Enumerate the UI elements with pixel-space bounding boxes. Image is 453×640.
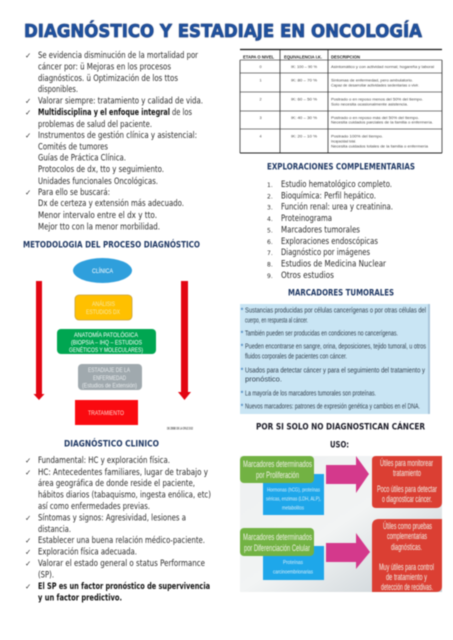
text block: clinical diagnosis: ✓ (25, 468, 31, 477)
node: tratamiento: TRATAMIENTO (88, 411, 124, 417)
title: DIAGNÓSTICO Y ESTADIAJE EN ONCOLOGÍA (24, 20, 422, 42)
numbered list: complementary studies: Función renal: urea y creatinina. (281, 202, 393, 212)
text block: clinical diagnosis: ✓ (25, 559, 31, 568)
text block: general points: Guías de Práctica Clínica. (38, 154, 126, 164)
table: performance status: IK: 40 – 30 % (291, 116, 318, 120)
table: performance status: Capaz de desarrollar actividades sedentarias o vivir. (331, 84, 419, 88)
text block: clinical diagnosis (25, 455, 211, 604)
box: proliferation markers: Marcadores determinados (243, 458, 312, 469)
node: análisis: ANÁLISIS (92, 301, 115, 308)
box: proliferation uses: tratamiento (393, 467, 421, 478)
text block: clinical diagnosis: HC: Antecedentes familiares, lugar de trabajo y (38, 468, 208, 478)
panel: tumour markers: * (240, 388, 244, 398)
numbered list: complementary studies: 8. (267, 262, 273, 268)
box: differentiation markers: carcinoembrionarias (273, 570, 313, 576)
text block: clinical diagnosis: área geográfica de donde reside el paciente, (38, 479, 195, 489)
text block: general points: ✓ (25, 96, 31, 106)
panel: tumour markers: La mayoría de los marcadores tumorales son proteínas. (245, 388, 376, 398)
table: performance status: 0 (260, 65, 262, 69)
table: performance status: Postrado o en reposo más del 50% del tiempo. (331, 116, 419, 120)
table: performance status: 4 (260, 134, 262, 138)
text block: general points (25, 50, 203, 232)
text block: general points: Valorar siempre: tratamiento y calidad de vida. (38, 96, 203, 106)
text block: general points: ✓ (25, 108, 31, 117)
heading: metodología: METODOLOGIA DEL PROCESO DIAGNÓSTICO (23, 238, 200, 250)
node: estadiaje: ESTADIAJE DE LA (88, 368, 130, 374)
heading: uso: USO: (330, 440, 349, 450)
panel: tumour markers: pronóstico. (245, 374, 282, 384)
table: performance status: Necesita cuidados parciales de la familia o enfermería. (331, 120, 433, 124)
box: differentiation uses: diagnósticas. (391, 541, 422, 552)
text block: clinical diagnosis: ✓ (25, 456, 31, 465)
node: anatomía patológica: GENÉTICOS Y MOLECULARES) (69, 347, 143, 354)
numbered list: complementary studies: Diagnóstico por imágenes (281, 247, 370, 258)
text block: general points: Dx de certeza y extensión más adecuado. (38, 198, 184, 209)
arrow: right red (178, 281, 191, 400)
table: performance status: 1 (260, 78, 262, 82)
text block: general points: Se evidencia disminución de la mortalidad por (38, 50, 198, 61)
text block: clinical diagnosis: Síntomas y signos: Agresividad, lesiones a (38, 514, 186, 524)
numbered list: complementary studies: 1. (267, 182, 273, 189)
text block: general points: Menor intervalo entre el dx y tto. (38, 211, 157, 221)
panel: tumour markers (240, 304, 430, 414)
box: differentiation uses: de tratamiento y (386, 571, 427, 582)
arrow: pink bottom (326, 533, 370, 569)
numbered list: complementary studies: Estudios de Medicina Nuclear (281, 260, 386, 270)
flow chart: diagnostic process (34, 258, 193, 430)
numbered list: complementary studies (267, 179, 393, 281)
table: performance status: IK: 60 – 50 % (291, 98, 318, 102)
text block: general points: disponibles. (38, 85, 78, 95)
text block: clinical diagnosis: ✓ (25, 536, 31, 545)
text block: clinical diagnosis: Exploración física adecuada. (38, 546, 137, 558)
table: performance status: IK: 20 – 10 % (291, 134, 318, 138)
text block: clinical diagnosis: Fundamental: HC y exploración física. (38, 455, 170, 466)
heading: exploraciones complementarias: EXPLORACIONES COMPLEMENTARIAS (267, 162, 415, 172)
box: differentiation markers: por Diferenciación Celular (244, 542, 310, 553)
numbered list: complementary studies: Bioquímica: Perfil hepático. (281, 192, 376, 202)
text block: clinical diagnosis: El SP es un factor pronóstico de supervivencia (38, 581, 210, 592)
table: performance status: EQUIVALENCIA I.K. (284, 54, 322, 60)
box: proliferation markers: metabolitos (282, 506, 304, 512)
panel: tumour markers: fluidos corporales de pacientes con cáncer. (245, 352, 347, 360)
text block: general points: Para ello se buscará: (38, 188, 110, 198)
text block: clinical diagnosis: ✓ (25, 514, 31, 522)
text block: clinical diagnosis: Establecer una buena relación médico-paciente. (38, 535, 205, 546)
text block: general points: Multidisciplina y el enfoque integral (38, 108, 170, 118)
numbered list: complementary studies: 3. (267, 204, 273, 212)
node: análisis (75, 295, 132, 320)
panel: tumour markers: cuerpo, en respuesta al cáncer. (245, 316, 308, 324)
text block: clinical diagnosis: hábitos diarios (tabaquismo, ingesta enólica, etc) (38, 490, 211, 500)
text block: general points: Mejor tto con la menor morbilidad. (38, 222, 160, 232)
panel: tumour markers: * (240, 328, 244, 338)
panel: tumour markers: * (240, 306, 244, 314)
text block: general points: ✓ (25, 51, 31, 60)
box: proliferation markers: por Proliferación (256, 469, 299, 480)
node: clínica: CLÍNICA (92, 268, 113, 275)
text block: clinical diagnosis: (SP). (38, 570, 54, 580)
panel: tumour markers: * (240, 366, 244, 374)
numbered list: complementary studies: 7. (267, 250, 273, 257)
text block: general points: problemas de salud del paciente. (38, 120, 152, 130)
numbered list: complementary studies: 6. (267, 239, 273, 246)
source note: DE ZIEBE DE LA CRUZ 2022 (167, 426, 193, 430)
numbered list: complementary studies: 9. (267, 273, 273, 280)
panel: tumour markers: * (240, 342, 244, 350)
text block: general points: Protocolos de dx, tto y seguimiento. (38, 165, 164, 175)
numbered list: complementary studies: 2. (267, 194, 273, 200)
text block: clinical diagnosis: distancia. (38, 525, 71, 535)
node: estadiaje (78, 364, 142, 390)
table: performance status: ETAPA O NIVEL (243, 54, 274, 60)
box: differentiation markers: Proteínas (283, 560, 303, 566)
box: differentiation markers (240, 528, 324, 580)
node: análisis: ESTUDIOS DX (86, 310, 120, 316)
node: anatomía patológica: (BIOPSIA – IHQ – ESTUDIOS (71, 340, 142, 346)
node: tratamiento (75, 400, 138, 425)
text block: general points: Comités de tumores (38, 142, 108, 152)
text block: general points: de los (172, 108, 192, 118)
table: performance status: Necesita cuidados totales de la familia o enfermería (331, 144, 429, 148)
node: estadiaje: ENFERMEDAD (93, 376, 127, 382)
text block: clinical diagnosis: y un factor predictivo. (38, 594, 122, 604)
numbered list: complementary studies: Otros estudios (281, 271, 334, 281)
table: performance status: Solo necesita ocasionalmente asistencia. (331, 102, 408, 106)
numbered list: complementary studies: Proteinograma (281, 214, 332, 224)
text block: general points: ✓ (25, 188, 31, 197)
numbered list: complementary studies: Exploraciones endoscópicas (281, 236, 378, 247)
node: anatomía patológica (57, 329, 156, 354)
diagram: marker uses (240, 456, 442, 592)
text block: general points: Instrumentos de gestión clínica y asistencial: (38, 130, 197, 141)
table: performance status: Postrado 100% del tiempo. (331, 134, 383, 138)
heading: diagnóstico clínico: DIAGNÓSTICO CLINICO (64, 438, 159, 450)
node: clínica (73, 258, 132, 283)
box: proliferation markers: séricas, enzimas (LDH, ALP), (266, 496, 321, 502)
table: performance status: 3 (260, 116, 262, 120)
arrow: pink top (326, 456, 369, 493)
text block: clinical diagnosis: Valorar el estado general o status Performance (38, 559, 205, 569)
text block: clinical diagnosis: ✓ (25, 582, 31, 591)
table: performance status: IK: 80 – 70 % (291, 78, 318, 82)
table: performance status: 2 (260, 98, 262, 102)
box: differentiation markers: Marcadores determinados (243, 531, 312, 542)
box: proliferation markers (240, 456, 324, 515)
text block: general points: cáncer por: ü Mejoras en los procesos (38, 62, 171, 72)
box: proliferation uses (372, 456, 442, 508)
text block: clinical diagnosis: ✓ (25, 548, 31, 556)
numbered list: complementary studies: 5. (267, 228, 273, 234)
numbered list: complementary studies: Estudio hematológico completo. (281, 179, 392, 190)
table: performance status: Incapacidad total. (331, 140, 356, 144)
box: differentiation uses (372, 519, 442, 592)
table: performance status: Postrado o en reposo menos del 50% del tiempo. (331, 98, 423, 102)
table: performance status (240, 49, 442, 153)
box: proliferation markers: Hormonas (hCG), proteínas (267, 488, 320, 494)
panel: tumour markers: * (240, 402, 244, 410)
numbered list: complementary studies: Marcadores tumorales (281, 226, 360, 236)
numbered list: complementary studies: 4. (267, 216, 273, 223)
table: performance status: DESCRIPCION (331, 54, 360, 60)
node: estadiaje: (Estudios de Extensión) (82, 384, 137, 390)
text block: general points: Unidades funcionales Oncológicas. (38, 176, 158, 187)
text block: general points: ✓ (25, 131, 31, 140)
arrow: left red (34, 281, 44, 400)
text block: clinical diagnosis: así como enfermedades previas. (38, 502, 150, 512)
table: performance status: IK: 100 – 90 % (291, 65, 318, 69)
text block: general points: diagnósticos. ü Optimización de los ttos (38, 73, 178, 84)
node: anatomía patológica: ANATOMÍA PATOLÓGICA (74, 332, 138, 339)
heading: marcadores tumorales: MARCADORES TUMORALES (288, 288, 394, 298)
table: performance status: Síntomas de enfermedad, pero ambulatorio. (331, 78, 413, 82)
heading: por sí solo no diagnostican: POR SI SOLO NO DIAGNOSTICAN CÁNCER (256, 420, 425, 432)
table: performance status: Asintomático y con actividad normal; hogareña y laboral (331, 65, 434, 69)
